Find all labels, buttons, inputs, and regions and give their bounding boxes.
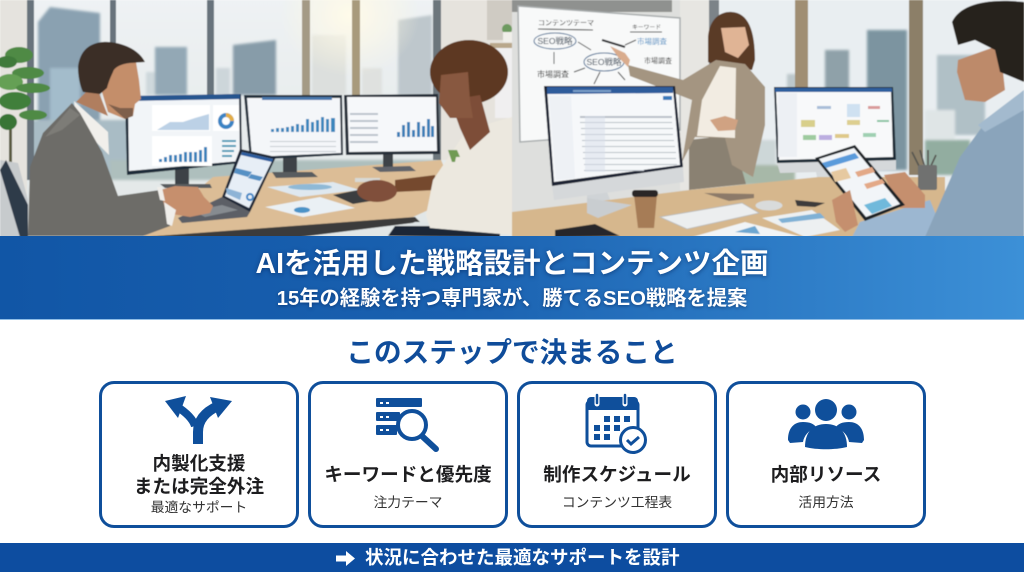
- whiteboard with strategy notes: 市場調査: [537, 69, 569, 79]
- card subtitle: 活用方法: [798, 495, 854, 510]
- city skyline: [30, 7, 440, 180]
- monitor: analytics dashboard: [125, 94, 242, 188]
- monitor: production calendar: [774, 87, 896, 192]
- desk right: [512, 177, 945, 237]
- card: keywords and priority: [308, 381, 508, 528]
- plant: [0, 47, 50, 170]
- icon: group of people: [788, 399, 864, 450]
- laptop: [178, 149, 276, 223]
- card subtitle: コンテンツ工程表: [562, 495, 672, 510]
- footer text: 状況に合わせた最適なサポートを設計: [365, 547, 680, 568]
- whiteboard with strategy notes: キーワード: [632, 24, 661, 31]
- banner heading: AIを活用した戦略設計とコンテンツ企画: [255, 248, 768, 280]
- icon: calendar with check: [586, 394, 647, 454]
- banner subheading: 15年の経験を持つ専門家が、勝てるSEO戦略を提案: [277, 288, 747, 310]
- desk: [143, 160, 457, 237]
- card subtitle: 注力テーマ: [374, 495, 442, 510]
- left office scene: [0, 0, 512, 237]
- whiteboard with strategy notes: SEO戦略: [587, 57, 622, 67]
- right office scene: [512, 0, 1024, 237]
- card title: 制作スケジュール: [543, 464, 691, 485]
- card title: [134, 453, 264, 497]
- whiteboard with strategy notes: コンテンツテーマ: [538, 19, 594, 27]
- card: internal resources: [726, 381, 926, 528]
- skyline right: [720, 30, 985, 185]
- card subtitle: 最適なサポート: [151, 500, 247, 515]
- monitor base on desk: [587, 198, 632, 218]
- icon: right arrow: [336, 551, 355, 566]
- monitor: keyword table: [544, 86, 684, 218]
- man in grey jacket at laptop: [0, 42, 213, 237]
- coffee cup: [632, 190, 658, 228]
- banner: [0, 236, 1024, 320]
- whiteboard with strategy notes: [518, 6, 680, 142]
- window frames: [27, 0, 441, 180]
- card title: 内製化支援: [152, 453, 245, 474]
- pencil holder: [912, 150, 937, 190]
- mouse, phone and notebook: [555, 193, 825, 237]
- whiteboard with strategy notes: SEO戦略: [538, 36, 573, 46]
- whiteboard with strategy notes: 市場調査: [644, 56, 672, 65]
- card title: キーワードと優先度: [324, 464, 492, 485]
- photo: office team at work on SEO strategy: [0, 0, 1024, 236]
- woman in white blouse typing: [357, 40, 512, 237]
- presenter in beige blazer: [602, 12, 765, 190]
- keyboard: [660, 203, 759, 229]
- footer bar: [0, 543, 1024, 572]
- card title: 内部リソース: [771, 464, 881, 485]
- monitor: table and chart: [344, 94, 440, 172]
- sunlight glow: [280, 0, 420, 77]
- card: in-house or outsourced: [99, 381, 299, 528]
- printed charts on desk: [692, 210, 840, 237]
- tablet in hand: [815, 145, 905, 232]
- icon: branching arrows: [165, 396, 232, 444]
- printed reports on desk: [265, 178, 380, 217]
- man with tablet: [852, 1, 1024, 237]
- window frames right: [709, 0, 923, 175]
- whiteboard with strategy notes: 市場調査: [637, 36, 667, 46]
- section heading: このステップで決まること: [346, 337, 678, 368]
- card: production schedule: [517, 381, 717, 528]
- card title: または完全外注: [134, 476, 264, 497]
- monitor: bar chart dashboard: [244, 95, 343, 178]
- icon: database magnifier: [376, 398, 439, 452]
